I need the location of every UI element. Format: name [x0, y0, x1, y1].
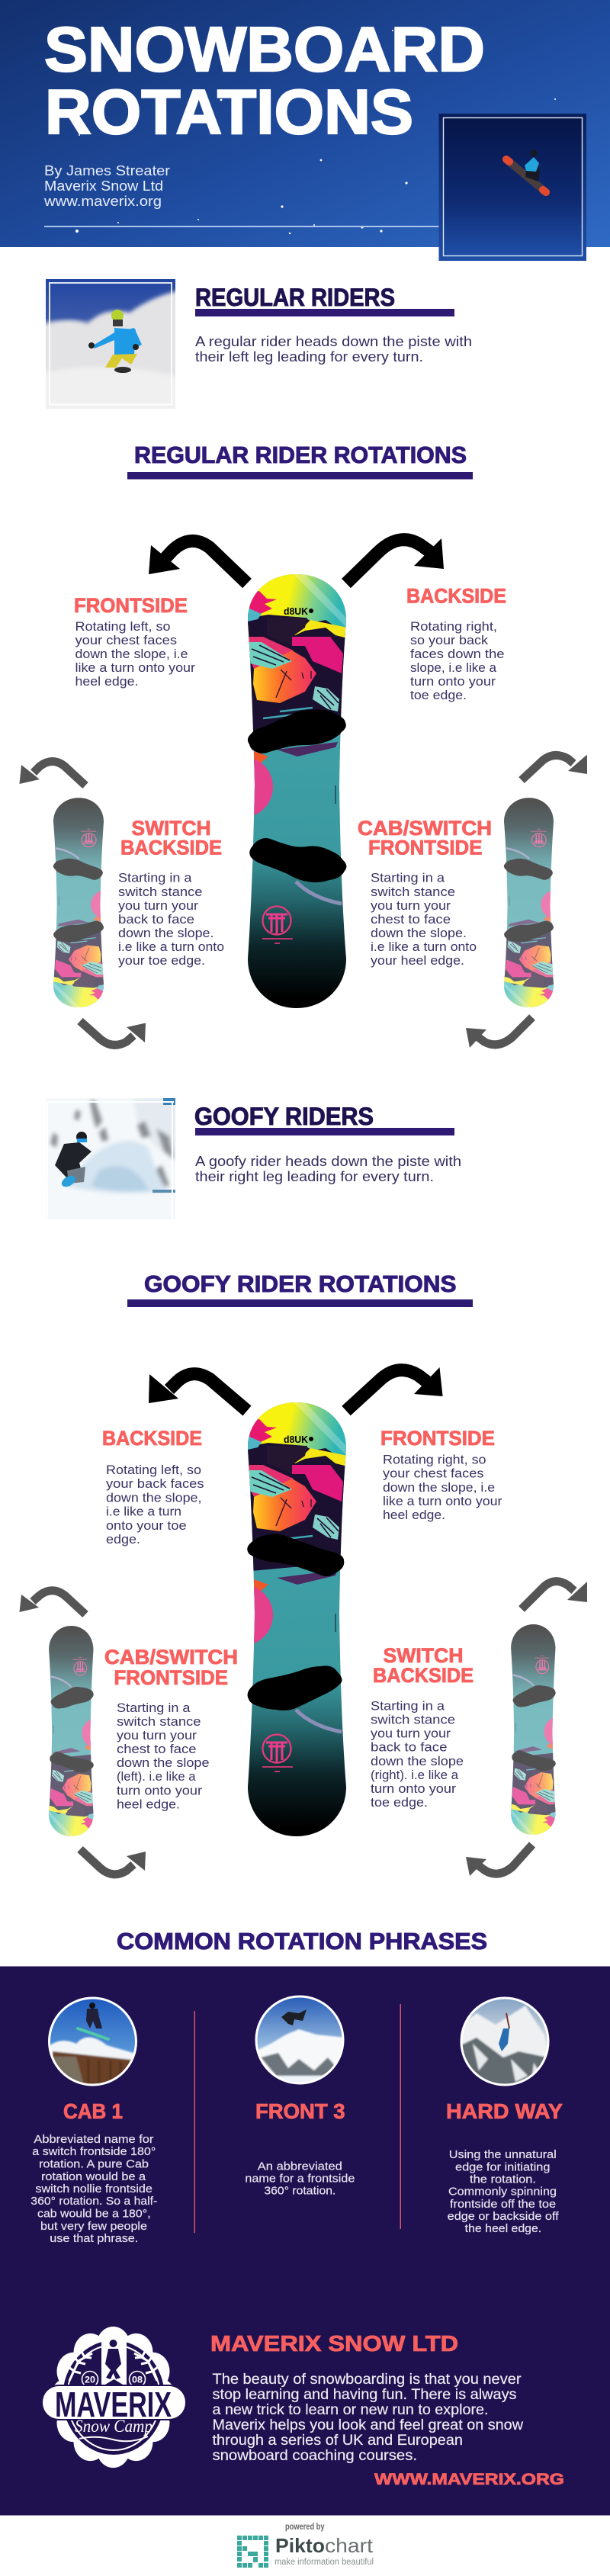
- text block: goofy switch backside: you turn your: [371, 1726, 451, 1740]
- arrow: goofy cab frontside top: [20, 1591, 85, 1614]
- text block: goofy cab switch frontside: chest to face: [117, 1742, 197, 1756]
- text block: frontside: [74, 594, 196, 689]
- text block: frontside: your chest faces: [75, 634, 177, 647]
- text block: company description: through a series of UK and European: [212, 2433, 463, 2449]
- text block: frontside: Rotating left, so: [75, 620, 171, 634]
- text block: backside: so your back: [410, 634, 489, 647]
- text block: frontside: heel edge.: [75, 675, 139, 689]
- photo: airborne snowboarder: [439, 114, 586, 261]
- heading: regular rider rotations: [127, 442, 473, 479]
- text block: goofy frontside: Rotating right, so: [383, 1453, 486, 1467]
- snowboard: regular main: [212, 572, 351, 1014]
- text block: cab switch frontside: chest to face: [371, 913, 451, 927]
- text block: cab switch frontside: CAB/SWITCH: [358, 817, 492, 840]
- text block: switch backside: i.e like a turn onto: [118, 940, 224, 954]
- photo: regular rider: [46, 279, 175, 409]
- text block: switch backside: switch stance: [118, 885, 203, 899]
- text block: goofy cab switch frontside: [104, 1646, 238, 1812]
- text block: goofy switch backside: SWITCH: [383, 1644, 464, 1667]
- phrase: hard way: edge for initiating: [455, 2161, 551, 2173]
- text block: goofy cab switch frontside: (left). i.e like a: [117, 1770, 196, 1784]
- text block: switch backside: your toe edge.: [118, 954, 205, 968]
- heading: goofy rider rotations: GOOFY RIDER ROTATIONS: [144, 1271, 456, 1297]
- divider: right: [400, 2004, 401, 2229]
- text block: cab switch frontside: [358, 817, 492, 968]
- phrase: cab 1: Abbreviated name for: [34, 2133, 153, 2146]
- panel: phrases and company background: [0, 1966, 610, 2515]
- text block: switch backside: you turn your: [118, 899, 199, 913]
- text block: goofy switch backside: [371, 1644, 474, 1810]
- text block: goofy backside: onto your toe: [106, 1519, 186, 1533]
- text block: company description: Maverix helps you look and feel great on snow: [212, 2417, 523, 2433]
- text block: goofy switch backside: (right). i.e like a: [371, 1768, 459, 1782]
- phrase: cab 1: rotation. A pure Cab: [39, 2158, 149, 2170]
- text block: frontside: down the slope, i.e: [75, 647, 188, 661]
- text block: regular rider description: their left leg leading for every turn.: [195, 349, 423, 365]
- text block: company description: stop learning and having fun. There is always: [212, 2387, 517, 2403]
- text block: goofy switch backside: back to face: [371, 1740, 447, 1754]
- logo: maverix snow camp badge: [41, 2327, 187, 2468]
- arrow: goofy switch backside bottom: [466, 1845, 532, 1876]
- title: SNOWBOARD: [44, 14, 485, 85]
- phrase: hard way: the heel edge.: [465, 2222, 541, 2235]
- footer: powered by piktochart: Pikto: [275, 2534, 325, 2557]
- phrase: cab 1: rotation would be a: [41, 2170, 146, 2183]
- text block: company description: snowboard coaching courses.: [212, 2448, 417, 2464]
- arrow: goofy cab frontside bottom: [80, 1849, 146, 1874]
- phrase: front 3: name for a frontside: [245, 2172, 355, 2186]
- author credits: Maverix Snow Ltd: [44, 178, 163, 194]
- text block: goofy switch backside: switch stance: [371, 1713, 455, 1726]
- logo: maverix snow camp badge: MAVERIX: [55, 2385, 172, 2424]
- snowboard: switch backside small: [51, 795, 122, 1008]
- phrase: hard way: frontside off the toe: [450, 2198, 556, 2211]
- text block: goofy frontside: your chest faces: [383, 1467, 483, 1481]
- text block: cab switch frontside: switch stance: [371, 885, 455, 899]
- arrow: switch backside top: [20, 761, 85, 785]
- text block: goofy rider description: A goofy rider heads down the piste with: [195, 1154, 461, 1169]
- text block: goofy switch backside: toe edge.: [371, 1796, 428, 1810]
- snowboard: goofy switch backside small: [509, 1621, 572, 1836]
- text block: goofy switch backside: turn onto your: [371, 1782, 457, 1796]
- text block: switch backside: BACKSIDE: [120, 836, 222, 859]
- text block: cab switch frontside: i.e like a turn onto: [371, 940, 477, 954]
- heading: regular rider rotations: REGULAR RIDER ROTATIONS: [134, 442, 467, 468]
- phrase: hard way: edge or backside off: [448, 2210, 560, 2223]
- photo: front 3: [255, 1995, 345, 2085]
- text block: goofy switch backside: Starting in a: [371, 1699, 445, 1713]
- text block: switch backside: Starting in a: [118, 871, 192, 885]
- logo: maverix snow camp badge: 08: [132, 2375, 143, 2385]
- author credits: www.maverix.org: [43, 193, 162, 209]
- footer: powered by piktochart: powered by: [285, 2523, 325, 2532]
- arrow: goofy backside: [149, 1374, 247, 1411]
- phrase: cab 1: cab would be a 180°,: [37, 2207, 151, 2221]
- text block: cab switch frontside: down the slope.: [371, 927, 467, 940]
- text block: frontside: like a turn onto your: [75, 661, 196, 675]
- photo: goofy rider: [46, 1098, 183, 1219]
- text block: switch backside: SWITCH: [131, 817, 210, 840]
- text block: goofy rider description: their right leg leading for every turn.: [195, 1169, 434, 1184]
- snowboard: goofy main: [212, 1400, 351, 1842]
- snowboard: regular main: d8UK: [284, 605, 309, 617]
- text block: switch backside: [118, 817, 224, 968]
- text block: switch backside: back to face: [118, 913, 194, 927]
- snowboard: goofy cab frontside small: [47, 1623, 110, 1837]
- text block: goofy backside: i.e like a turn: [106, 1505, 181, 1519]
- text block: switch backside: down the slope.: [118, 927, 214, 940]
- logo: maverix snow camp badge: Snow Camp: [75, 2417, 152, 2436]
- text block: goofy frontside: like a turn onto your: [383, 1495, 502, 1508]
- arrow: goofy switch backside top: [522, 1582, 587, 1609]
- text block: goofy cab switch frontside: down the slope: [117, 1756, 209, 1770]
- section heading: regular riders: REGULAR RIDERS: [195, 284, 395, 311]
- text block: goofy frontside: FRONTSIDE: [380, 1427, 495, 1450]
- icon: piktochart logo: [237, 2536, 268, 2568]
- photo: cab 1: [48, 1996, 137, 2086]
- text block: backside: toe edge.: [410, 689, 467, 702]
- title: [44, 14, 485, 147]
- photo: hard way: [461, 1996, 549, 2086]
- text block: cab switch frontside: you turn your: [371, 899, 451, 913]
- text block: cab switch frontside: your heel edge.: [371, 954, 464, 968]
- arrow: cab frontside top: [522, 755, 587, 780]
- phrase: hard way: [446, 2099, 563, 2235]
- text block: goofy backside: Rotating left, so: [106, 1463, 201, 1477]
- text block: backside: [406, 584, 506, 702]
- text block: backside: faces down the: [410, 647, 505, 661]
- phrase: hard way: Commonly spinning: [448, 2186, 557, 2198]
- phrase: cab 1: 360° rotation. So a half-: [30, 2195, 157, 2208]
- heading: goofy rider rotations: [127, 1271, 473, 1307]
- logo: maverix snow camp badge: 20: [85, 2375, 95, 2385]
- text block: goofy rider description: [195, 1154, 461, 1184]
- phrase: cab 1: switch nollie frontside: [35, 2183, 152, 2195]
- heading: common rotation phrases: COMMON ROTATION PHRASES: [117, 1929, 487, 1954]
- text block: goofy frontside: [380, 1427, 502, 1522]
- phrase: hard way: the rotation.: [470, 2173, 536, 2186]
- company url: WWW.MAVERIX.ORG: [374, 2470, 564, 2488]
- phrase: cab 1: CAB 1: [63, 2099, 123, 2123]
- text block: goofy frontside: heel edge.: [383, 1508, 445, 1522]
- author credits: By James Streater: [44, 162, 170, 178]
- footer: powered by piktochart: chart: [325, 2534, 374, 2557]
- phrase: hard way: Using the unnatural: [449, 2148, 557, 2161]
- arrow: cab frontside bottom: [466, 1017, 532, 1048]
- text block: goofy backside: BACKSIDE: [102, 1427, 202, 1450]
- text block: backside: BACKSIDE: [406, 584, 506, 607]
- text block: goofy frontside: down the slope, i.e: [383, 1481, 495, 1495]
- arrow: backside rotation: [346, 538, 444, 583]
- phrase: front 3: An abbreviated: [258, 2160, 342, 2173]
- section heading: goofy riders: [194, 1103, 454, 1135]
- text block: goofy cab switch frontside: Starting in a: [117, 1701, 191, 1715]
- text block: goofy backside: edge.: [106, 1533, 140, 1547]
- text block: goofy cab switch frontside: FRONTSIDE: [114, 1666, 228, 1689]
- snowboard: goofy main: d8UK: [284, 1434, 309, 1445]
- phrase: front 3: FRONT 3: [255, 2099, 345, 2123]
- text block: goofy cab switch frontside: you turn your: [117, 1729, 197, 1742]
- text block: goofy cab switch frontside: CAB/SWITCH: [104, 1646, 238, 1669]
- text block: goofy backside: your back faces: [106, 1477, 204, 1491]
- text block: cab switch frontside: Starting in a: [371, 871, 445, 885]
- phrase: cab 1: but very few people: [40, 2220, 147, 2233]
- footer: powered by piktochart: make information beautiful: [274, 2558, 374, 2567]
- arrow: switch backside bottom: [80, 1021, 146, 1045]
- phrase: cab 1: [30, 2099, 157, 2245]
- phrase: cab 1: a switch frontside 180°: [32, 2145, 156, 2158]
- text block: backside: slope, i.e like a: [410, 661, 497, 675]
- text block: company description: [212, 2372, 523, 2464]
- footer: powered by piktochart: [237, 2523, 374, 2568]
- text block: backside: Rotating right,: [410, 620, 497, 634]
- divider: left: [194, 2011, 195, 2233]
- text block: company description: a new trick to learn or new run to explore.: [212, 2402, 488, 2418]
- snowboard: cab frontside small: [502, 795, 572, 1008]
- phrase: hard way: HARD WAY: [446, 2099, 563, 2123]
- arrow: goofy frontside: [346, 1367, 443, 1411]
- phrase: front 3: [245, 2099, 355, 2198]
- phrase: cab 1: use that phrase.: [50, 2232, 138, 2245]
- phrase: front 3: 360° rotation.: [264, 2184, 336, 2198]
- section heading: goofy riders: GOOFY RIDERS: [194, 1103, 374, 1130]
- text block: goofy cab switch frontside: heel edge.: [117, 1798, 180, 1812]
- author credits: [43, 162, 170, 209]
- text block: regular rider description: [195, 334, 472, 365]
- title: ROTATIONS: [45, 76, 413, 147]
- text block: cab switch frontside: FRONTSIDE: [368, 836, 482, 859]
- text block: goofy cab switch frontside: switch stance: [117, 1715, 201, 1729]
- text block: goofy switch backside: down the slope: [371, 1755, 464, 1768]
- text block: goofy backside: [102, 1427, 204, 1547]
- panel: header: [0, 0, 610, 247]
- text block: company description: The beauty of snowboarding is that you never: [212, 2372, 522, 2388]
- arrow: frontside rotation: [149, 541, 247, 583]
- text block: backside: turn onto your: [410, 675, 496, 689]
- text block: frontside: FRONTSIDE: [74, 594, 188, 617]
- text block: goofy backside: down the slope,: [106, 1492, 201, 1505]
- text block: goofy switch backside: BACKSIDE: [373, 1664, 474, 1687]
- company heading: MAVERIX SNOW LTD: [210, 2332, 458, 2356]
- text block: regular rider description: A regular rider heads down the piste with: [195, 334, 472, 349]
- text block: goofy cab switch frontside: turn onto your: [117, 1784, 203, 1798]
